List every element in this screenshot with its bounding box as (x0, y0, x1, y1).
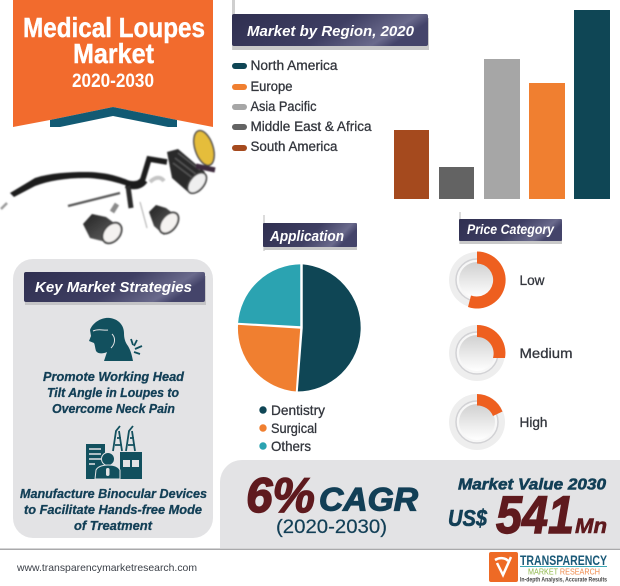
strategy text 2: to Facilitate Hands-free Mode (24, 502, 202, 517)
market value number: 541 (496, 486, 574, 545)
title banner (13, 0, 213, 127)
legend: regions: Europe (250, 79, 292, 94)
currency: US$ (448, 505, 487, 531)
product image: medical loupes (1, 128, 218, 247)
logo (489, 552, 608, 584)
legend: application: Others (271, 438, 311, 454)
strategy text 1: Tilt Angle in Loupes to (47, 385, 179, 400)
banner shape (13, 0, 213, 127)
title: Medical Loupes (23, 12, 205, 43)
label: medium: Medium (520, 345, 572, 361)
panel: key market strategies (13, 259, 213, 538)
strategy text 2: of Treatment (74, 518, 153, 533)
label: low: Low (520, 272, 545, 288)
label: high: High (520, 414, 548, 430)
logo tagline: In-depth Analysis, Accurate Results (520, 578, 608, 584)
heading: market by region: Market by Region, 2020 (247, 23, 415, 40)
legend: application: Dentistry (271, 402, 325, 418)
footer url: www.transparencymarketresearch.com (16, 562, 197, 574)
heading: price category: Price Category (467, 222, 555, 237)
heading: price category (459, 212, 562, 244)
panel: cagr and market value (0, 460, 620, 550)
bar chart: regions (394, 10, 610, 199)
donut: low (449, 251, 506, 308)
strategy text 2 (20, 486, 207, 533)
heading: application: Application (269, 228, 344, 245)
legend: regions: South America (250, 139, 338, 154)
title line 2: Market (73, 38, 154, 69)
heading: key market strategies (24, 272, 206, 305)
panel: market by region (232, 0, 610, 199)
legend: regions: North America (250, 58, 338, 73)
pie chart: application (237, 264, 361, 392)
market value label: Market Value 2030 (458, 476, 606, 494)
logo mark (489, 552, 518, 582)
legend: application: Surgical (271, 420, 317, 436)
strategy text 1: Overcome Neck Pain (52, 401, 175, 416)
donut: medium (449, 325, 505, 381)
strategy text 1: Promote Working Head (43, 369, 185, 384)
panel: application (237, 215, 361, 454)
heading: key market strategies: Key Market Strategies (35, 279, 192, 296)
icon: neck pain (89, 318, 142, 361)
market value unit: Mn (575, 515, 607, 538)
strategy text 2: Manufacture Binocular Devices (20, 486, 207, 501)
heading: application (263, 215, 357, 251)
panel: price category (449, 212, 572, 450)
stat: 6%: 6% (246, 469, 315, 523)
banner chevron (50, 107, 177, 127)
icon: factory and worker (86, 426, 142, 479)
donut: high (449, 394, 505, 450)
years: 2020-2030 (72, 71, 154, 92)
legend: regions: Middle East & Africa (250, 119, 372, 134)
strategy text 1 (43, 369, 185, 416)
divider line (0, 548, 620, 550)
heading: market by region (232, 0, 429, 50)
legend: regions (232, 58, 372, 154)
stat: cagr period: (2020-2030) (276, 517, 387, 538)
stat: cagr: CAGR (319, 482, 418, 518)
logo subtitle: MARKET RESEARCH (528, 566, 600, 576)
legend: regions: Asia Pacific (250, 99, 317, 114)
legend: application (259, 402, 325, 454)
